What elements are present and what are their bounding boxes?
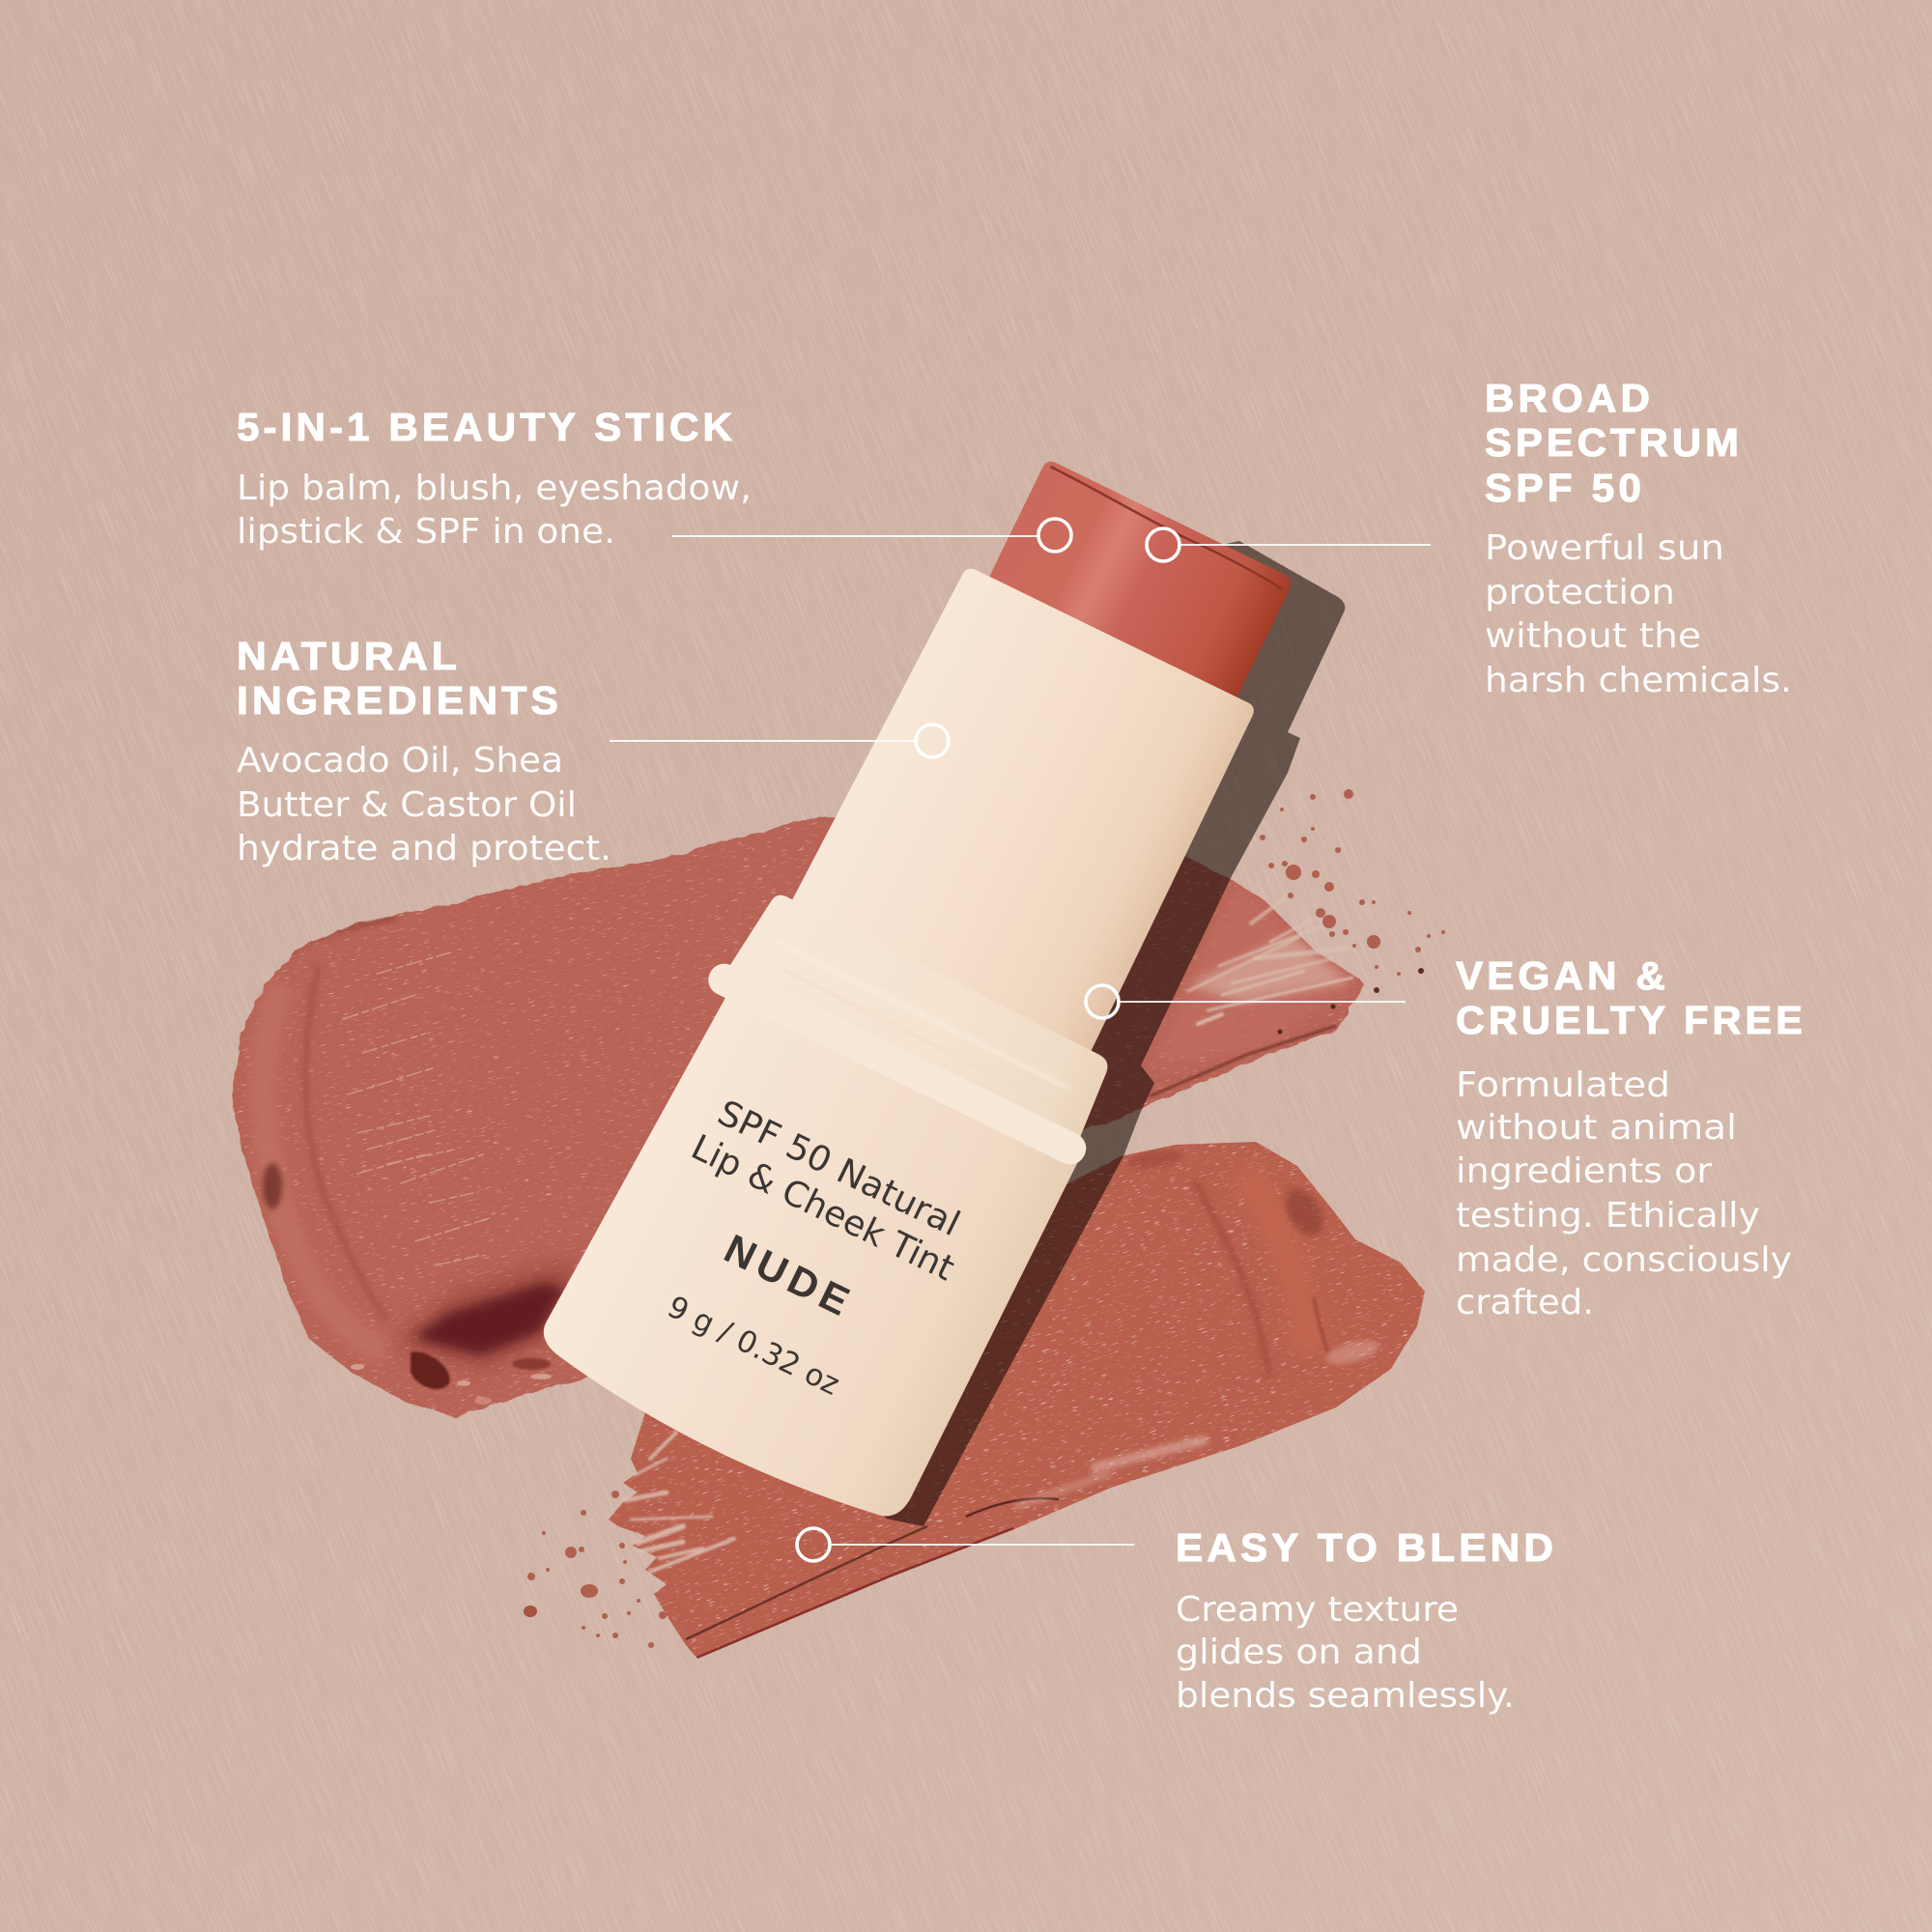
heading: BROAD — [1485, 376, 1654, 420]
body text: testing. Ethically — [1456, 1196, 1760, 1236]
body text — [237, 741, 611, 868]
label: weight: 9 g / 0.32 oz — [662, 1290, 844, 1403]
body text: blends seamlessly. — [1176, 1676, 1515, 1716]
heading — [237, 634, 562, 723]
body text: without the — [1485, 616, 1701, 656]
body text: lipstick & SPF in one. — [237, 512, 615, 552]
callout: easy to blend — [797, 1525, 1557, 1716]
heading: CRUELTY FREE — [1456, 998, 1806, 1042]
marker line and ring — [610, 724, 949, 757]
heading: 5-IN-1 BEAUTY STICK — [237, 405, 736, 449]
marker line and ring — [1086, 985, 1406, 1018]
marker line and ring — [672, 519, 1071, 552]
body text — [1485, 528, 1792, 700]
body text: without animal — [1456, 1108, 1737, 1148]
feathered start of lower smear — [625, 1433, 734, 1572]
body text: glides on and — [1176, 1633, 1422, 1672]
label: product type: Lip & Cheek Tint — [685, 1127, 960, 1289]
body text — [237, 469, 752, 552]
heading: SPF 50 — [1485, 466, 1645, 510]
heading — [1456, 953, 1806, 1042]
spatter: upper right droplets — [1260, 789, 1445, 1034]
heading: INGREDIENTS — [237, 678, 562, 723]
marker line and ring — [1147, 528, 1431, 561]
product: tinted beauty stick — [523, 424, 1351, 1539]
label: product name: SPF 50 Natural — [711, 1094, 966, 1244]
callout: natural ingredients — [237, 634, 949, 868]
marker line and ring — [797, 1528, 1134, 1561]
body text: Creamy texture — [1176, 1590, 1459, 1630]
body text: made, consciously — [1456, 1240, 1792, 1280]
stick: coloured bullet — [980, 459, 1294, 717]
callout: 5-in-1 beauty stick — [237, 405, 1071, 552]
body text: crafted. — [1456, 1283, 1594, 1322]
swatch: upper-left cream smear — [232, 816, 1364, 1418]
heading: VEGAN & — [1456, 953, 1669, 998]
swatch: feathered tail of upper smear — [1188, 898, 1352, 1024]
body text: Powerful sun — [1485, 528, 1724, 568]
stick: collar and ridge — [721, 887, 1120, 1152]
heading: EASY TO BLEND — [1176, 1525, 1557, 1570]
label: shade name: NUDE — [718, 1225, 857, 1324]
heading — [1485, 376, 1743, 510]
body text — [1176, 1590, 1515, 1716]
cast shadow of the stick — [676, 541, 1345, 1526]
swatch: lower-right cream smear — [609, 1142, 1425, 1659]
body text: harsh chemicals. — [1485, 661, 1792, 700]
body text: protection — [1485, 573, 1675, 612]
body text: Butter & Castor Oil — [237, 785, 577, 825]
callout: vegan and cruelty free — [1086, 953, 1806, 1322]
body text: hydrate and protect. — [237, 829, 611, 868]
body text: Avocado Oil, Shea — [237, 741, 563, 781]
glossy lumps at the smear foot — [351, 1364, 552, 1405]
body text: Lip balm, blush, eyeshadow, — [237, 469, 752, 508]
spatter: lower left droplets — [524, 1491, 667, 1648]
body text: Formulated — [1456, 1065, 1670, 1105]
body text — [1456, 1065, 1792, 1322]
stick: inner tube — [786, 561, 1259, 1058]
heading: NATURAL — [237, 634, 461, 678]
body text: ingredients or — [1456, 1151, 1712, 1191]
highlight streaks on smear — [343, 952, 493, 1265]
heading: SPECTRUM — [1485, 420, 1743, 465]
stick: base with label — [523, 958, 1092, 1539]
callout: broad spectrum SPF 50 — [1147, 376, 1792, 700]
